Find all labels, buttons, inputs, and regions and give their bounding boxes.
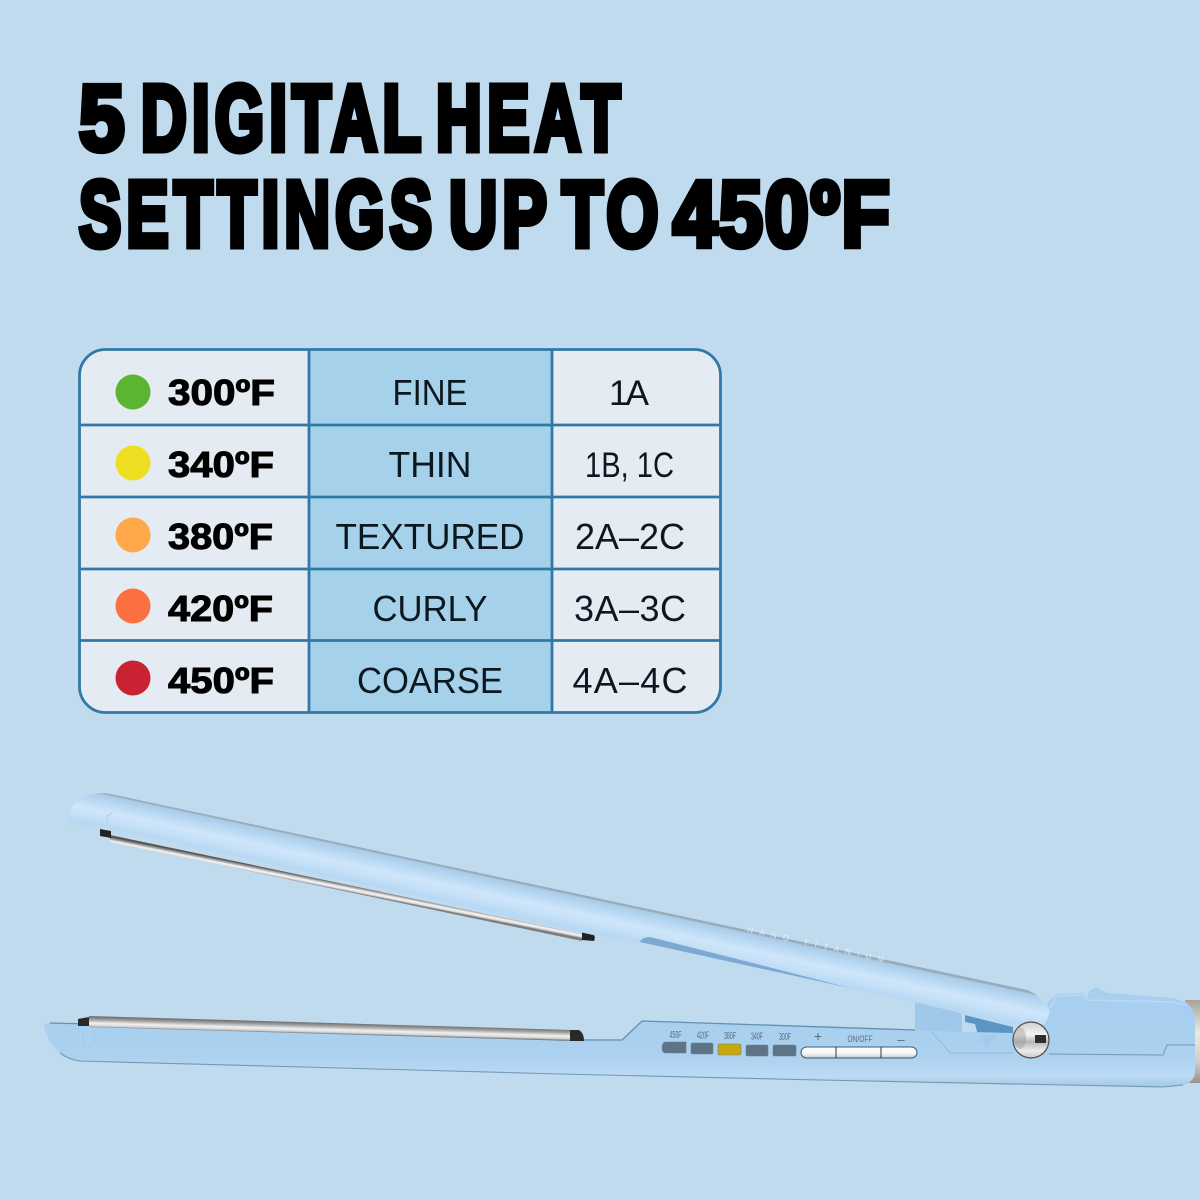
control labels: 380F — [724, 1031, 736, 1042]
title: 5 — [79, 66, 125, 170]
control labels: + — [814, 1028, 822, 1044]
row: 380F textured 2A-2C: 380ºF — [168, 516, 273, 557]
control labels: 300F — [779, 1032, 791, 1043]
lower plate rail — [78, 1016, 584, 1041]
row: 300F fine 1A: 300ºF — [168, 372, 275, 413]
row: 420F curly 3A-3C: 420ºF — [168, 588, 273, 629]
hinge post — [915, 998, 962, 1032]
control buttons — [801, 1047, 917, 1058]
title: DIGITAL — [141, 66, 421, 170]
control labels: – — [897, 1032, 905, 1047]
control labels: ON/OFF — [848, 1034, 873, 1044]
row: 450F coarse 4A-4C — [116, 660, 688, 701]
row: 300F fine 1A: 1A — [609, 374, 650, 413]
arm underside shadow — [640, 937, 850, 988]
row: 380F textured 2A-2C — [116, 516, 685, 557]
arm printed brand: NANO TITANIUM — [747, 925, 886, 964]
title: UP — [449, 163, 547, 267]
row: 340F thin 1B 1C: 1B, 1C — [585, 446, 674, 485]
row: 450F coarse 4A-4C: 4A–4C — [572, 660, 688, 701]
hinge mechanism — [965, 1015, 1013, 1035]
heat indicator lights — [662, 1042, 796, 1056]
body edges — [60, 1053, 1183, 1087]
title: 450ºF — [673, 163, 890, 266]
row: 420F curly 3A-3C — [116, 588, 686, 629]
control labels: 450F — [670, 1030, 682, 1041]
control labels — [670, 1028, 905, 1047]
hinge screw — [1013, 1022, 1049, 1058]
title: HEAT — [436, 66, 620, 170]
title: SETTINGS — [79, 162, 432, 266]
upper plate rail — [100, 829, 595, 941]
row: 450F coarse 4A-4C: COARSE — [357, 660, 503, 701]
body triangle detail — [978, 1035, 997, 1048]
lower tip notch — [83, 1031, 94, 1047]
row: 420F curly 3A-3C: 3A–3C — [574, 588, 686, 629]
upper arm — [67, 793, 1050, 1027]
control labels: 340F — [751, 1032, 763, 1042]
row: 380F textured 2A-2C: 2A–2C — [575, 516, 685, 557]
silver barrel — [1185, 1000, 1200, 1083]
row: 450F coarse 4A-4C: 450ºF — [168, 660, 274, 701]
row: 420F curly 3A-3C: CURLY — [372, 588, 488, 629]
panel seam — [932, 1032, 1013, 1053]
flat iron illustration — [44, 793, 1200, 1087]
lower arm and head body — [44, 987, 1195, 1087]
row: 300F fine 1A — [116, 372, 650, 413]
control labels: 420F — [697, 1030, 709, 1042]
title: TO — [562, 163, 658, 267]
row: 340F thin 1B 1C: 340ºF — [168, 444, 274, 485]
title — [79, 66, 890, 267]
panel: heat settings table — [79, 349, 721, 713]
row: 300F fine 1A: FINE — [392, 372, 468, 413]
arm tip notch — [107, 813, 112, 825]
row: 340F thin 1B 1C — [116, 444, 674, 485]
row: 380F textured 2A-2C: TEXTURED — [336, 516, 524, 557]
head seam line — [1049, 1045, 1195, 1055]
row: 340F thin 1B 1C: THIN — [388, 444, 472, 485]
iron head back ridge — [1050, 995, 1186, 1008]
